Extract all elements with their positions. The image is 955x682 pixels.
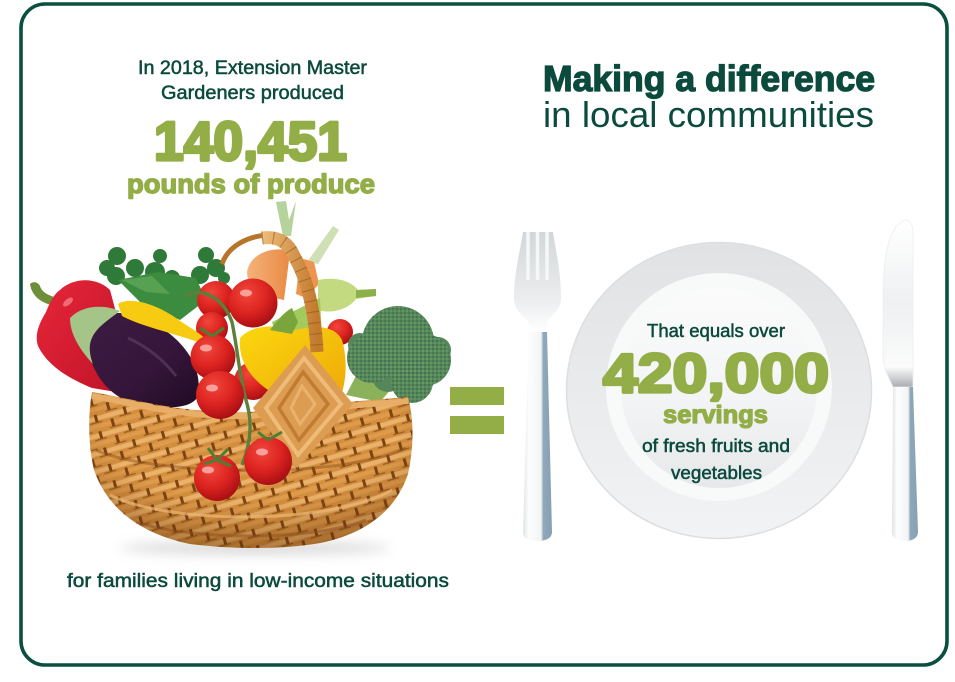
- caption under basket: for families living in low-income situations: [67, 571, 449, 592]
- fork icon: [514, 232, 561, 541]
- servings: servings: [663, 401, 768, 429]
- equals sign: [450, 387, 504, 434]
- yellow bell pepper: [240, 308, 346, 402]
- of fresh fruits and vegetables: of fresh fruits and: [642, 436, 790, 456]
- title: in local communities: [543, 94, 874, 135]
- big number 140,451: 140,451: [154, 110, 347, 172]
- basket shadow: [120, 542, 390, 554]
- wicker basket body: [89, 392, 412, 548]
- intro text: [138, 57, 368, 104]
- eggplant: [70, 307, 199, 407]
- basket of vegetables illustration: [30, 201, 451, 554]
- green chili pepper: [272, 279, 376, 350]
- knife icon: [883, 220, 918, 541]
- red pepper: [30, 280, 118, 392]
- intro text: In 2018, Extension Master: [138, 57, 368, 79]
- yellow chili: [118, 301, 206, 342]
- woven diamond: [253, 345, 353, 468]
- of fresh fruits and vegetables: vegetables: [671, 463, 762, 483]
- that equals over: That equals over: [647, 321, 785, 341]
- handle rear: [222, 235, 268, 264]
- of fresh fruits and vegetables: [642, 436, 790, 483]
- big number 420,000: 420,000: [603, 342, 829, 404]
- title: Making a difference: [543, 58, 875, 99]
- title: [543, 58, 875, 135]
- intro text: Gardeners produced: [161, 82, 344, 104]
- back red tomatoes: [196, 281, 353, 400]
- dinner plate: [566, 242, 872, 538]
- plate text block: [603, 321, 829, 483]
- basket handle: [262, 238, 317, 352]
- tomato vine: [185, 278, 292, 501]
- pounds of produce: pounds of produce: [127, 169, 375, 199]
- parsley: [99, 247, 230, 320]
- carrots: [247, 201, 339, 300]
- left headline block: [127, 57, 375, 199]
- broccoli: [346, 306, 451, 403]
